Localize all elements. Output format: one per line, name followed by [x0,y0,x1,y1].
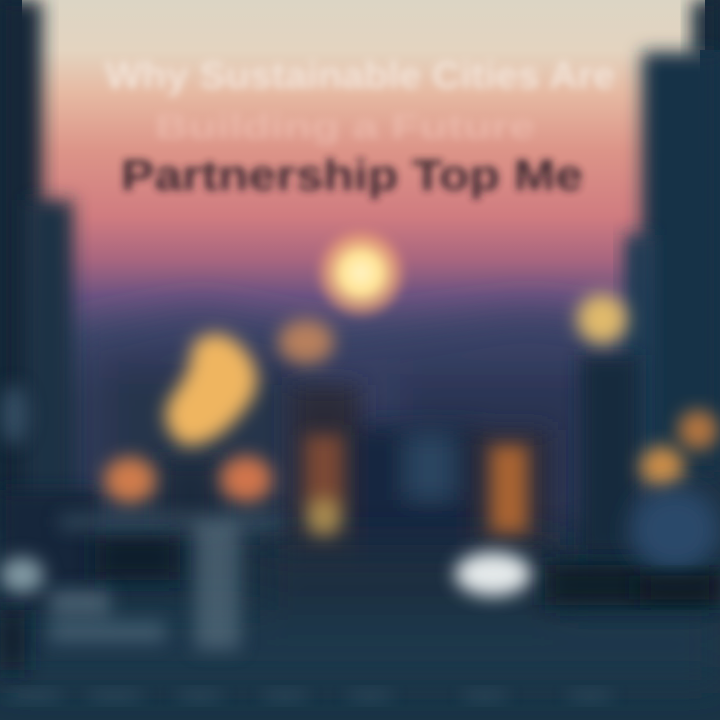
title line three: Partnership Top Me [121,151,583,200]
title line two: Building a Future [155,108,535,146]
sun [313,225,409,321]
car on right [630,488,720,600]
central dark towers [160,385,550,575]
distant skyline [70,310,640,535]
right buildings [580,0,720,555]
left buildings [0,0,100,620]
title line one: Why Sustainable Cities Are [105,55,615,97]
dark shadows [0,535,720,670]
bokeh lights [104,294,718,503]
pale street highlights [0,385,531,650]
warm tower glows [305,435,528,536]
road markings [10,690,610,702]
road and foreground [0,545,720,680]
